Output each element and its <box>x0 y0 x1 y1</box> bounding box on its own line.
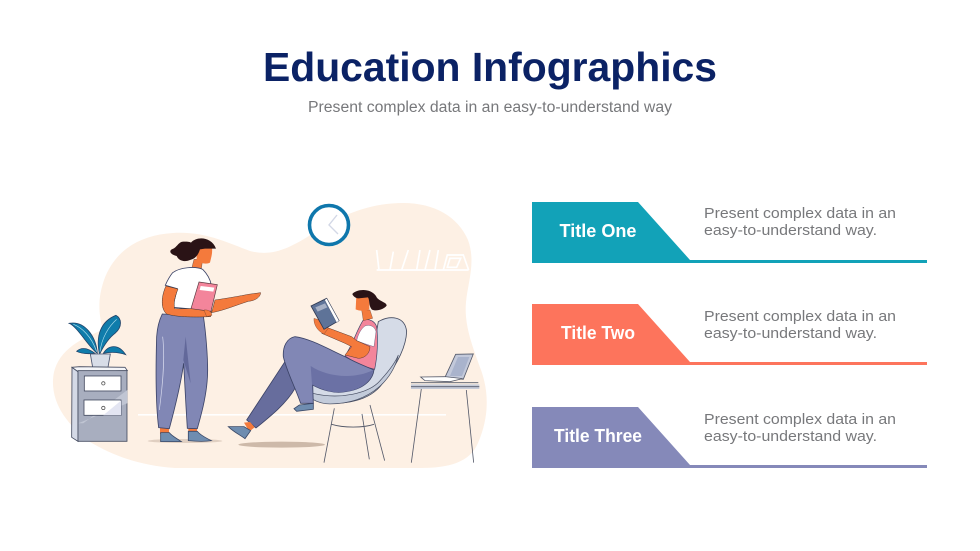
banner: title three <box>532 407 927 468</box>
standing woman with pink book <box>148 238 261 443</box>
label: title two: Title Two <box>561 322 635 343</box>
trousers <box>156 314 208 429</box>
wall clock <box>310 206 348 244</box>
description: title one: easy-to-understand way. <box>704 222 877 239</box>
label: title three: Title Three <box>554 425 642 446</box>
plant leaves <box>69 315 126 355</box>
label: title one: Title One <box>560 220 636 241</box>
description: title two <box>704 308 896 342</box>
far leg and shoes <box>247 362 295 428</box>
description: title three: Present complex data in an <box>704 411 896 428</box>
laptop <box>445 354 473 379</box>
description: title three: easy-to-understand way. <box>704 428 877 445</box>
background blob <box>53 203 487 468</box>
ground shadow <box>238 442 325 448</box>
chair seat <box>313 318 407 403</box>
trousers <box>283 337 374 403</box>
shoes <box>161 433 181 442</box>
drawers <box>84 376 121 391</box>
description: title three <box>704 411 896 445</box>
description: title one: Present complex data in an <box>704 205 896 222</box>
neck <box>192 259 203 269</box>
arm holding book <box>162 286 212 317</box>
banner: title two <box>532 304 927 365</box>
seated woman on chair reading <box>228 290 479 463</box>
illustration: education scene <box>53 203 487 468</box>
floor line <box>138 414 446 416</box>
subtitle: Present complex data in an easy-to-understand way <box>308 99 672 116</box>
chair legs <box>324 405 385 463</box>
description: title two: easy-to-understand way. <box>704 325 877 342</box>
arms <box>322 327 370 358</box>
white sleeve <box>357 325 376 347</box>
shadow <box>148 439 222 443</box>
panel: title three <box>532 407 927 468</box>
white shirt <box>165 268 211 310</box>
hair <box>352 290 387 310</box>
description: title two: Present complex data in an <box>704 308 896 325</box>
ankles <box>160 427 169 434</box>
banner: title one <box>532 202 927 263</box>
dark book <box>311 298 339 329</box>
title: Education Infographics <box>263 44 717 90</box>
face <box>197 247 212 264</box>
torso pink top <box>345 320 377 369</box>
hair <box>170 238 216 261</box>
extended arm <box>212 293 261 313</box>
description: title one <box>704 205 896 239</box>
panel: title one <box>532 202 927 263</box>
panel: title two <box>532 304 927 365</box>
plant pot <box>90 354 110 370</box>
shelf with books <box>377 250 469 270</box>
neck and face <box>362 310 373 321</box>
cabinet body <box>72 367 78 441</box>
filing cabinet with plant <box>69 315 127 441</box>
side table <box>411 384 479 389</box>
pink book <box>191 282 217 311</box>
